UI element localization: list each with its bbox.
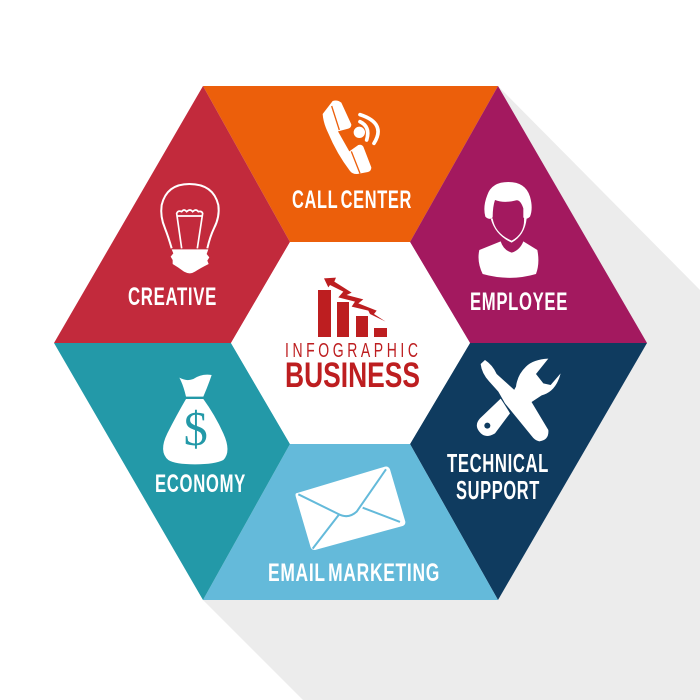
- panel: employee: [410, 86, 647, 343]
- label: email marketing: EMAIL MARKETING: [268, 559, 440, 587]
- icon: wrench and screwdriver: [477, 359, 561, 441]
- label: technical: TECHNICAL: [447, 448, 549, 478]
- panel: technical support: [410, 343, 647, 600]
- long drop shadow: [203, 86, 700, 700]
- icon: money bag: [163, 375, 227, 464]
- logo: bar chart with arrow: [318, 278, 387, 337]
- panel: call center: [203, 86, 498, 242]
- center hexagon: [231, 242, 470, 444]
- panel: creative: [54, 86, 290, 343]
- label: employee: EMPLOYEE: [470, 288, 568, 316]
- panel: economy: [54, 343, 290, 600]
- label: economy: ECONOMY: [155, 470, 246, 498]
- icon: phone with signal: [323, 100, 378, 174]
- icon: light bulb: [161, 184, 219, 273]
- label: creative: CREATIVE: [128, 283, 217, 311]
- logo word: infographic: INFOGRAPHIC: [285, 338, 418, 362]
- dollar sign: $: [184, 403, 208, 456]
- icon: envelope: [295, 467, 405, 550]
- label: call center: CALL CENTER: [292, 186, 412, 214]
- icon: person: [479, 182, 538, 278]
- panel: email marketing: [203, 444, 498, 600]
- label: support: SUPPORT: [456, 475, 540, 505]
- logo word: business: BUSINESS: [285, 356, 420, 395]
